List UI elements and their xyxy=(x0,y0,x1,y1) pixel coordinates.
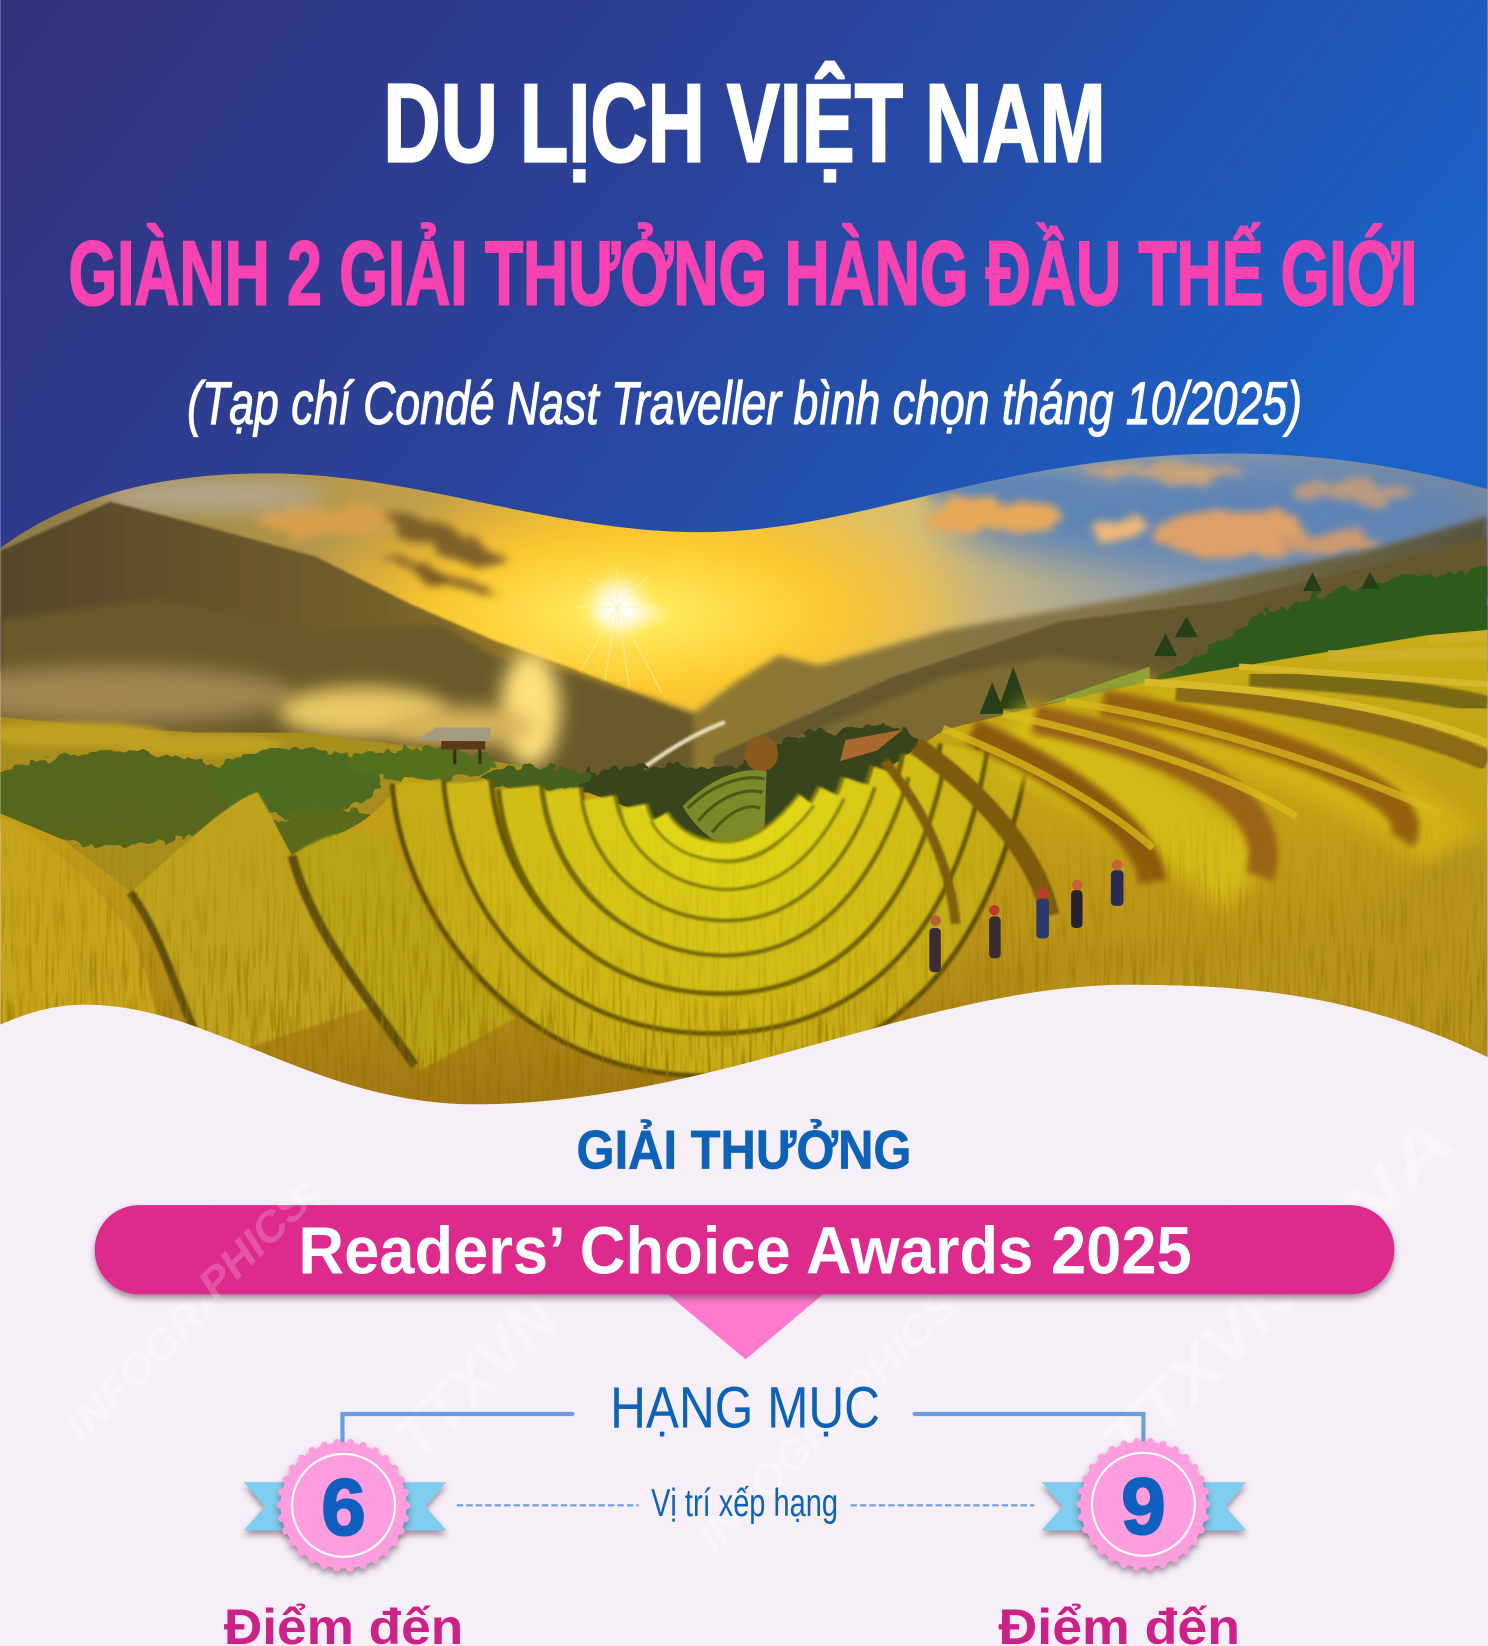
number 9: 9 xyxy=(1121,1462,1166,1551)
heading: award: GIẢI THƯỞNG xyxy=(577,1118,911,1180)
pointer triangle xyxy=(667,1293,824,1359)
watermarks: INFOGRAPHICS xyxy=(55,1172,333,1450)
hut xyxy=(417,727,490,764)
title line 1: DU LỊCH VIỆT NAM xyxy=(383,61,1106,186)
watermarks: TTXVN xyxy=(1087,1256,1311,1480)
grass ground xyxy=(0,630,1488,1113)
sun rays xyxy=(576,566,662,693)
concentric rice terraces xyxy=(418,735,1006,1050)
award banner xyxy=(95,1205,1394,1294)
grass texture xyxy=(0,844,1488,1104)
right dashed leader xyxy=(851,1504,1034,1506)
banner watermark: PHICS xyxy=(189,1178,318,1308)
valley trees and small terrace xyxy=(575,723,919,842)
left shelf and bushes xyxy=(0,717,588,966)
watermarks xyxy=(55,1103,1469,1560)
watermarks: INFOGRAPHICS xyxy=(687,1282,965,1560)
badge: rank 9 xyxy=(1042,1441,1246,1567)
foreground golden grass right xyxy=(1016,829,1488,1057)
sky xyxy=(0,441,1488,777)
farmers xyxy=(929,860,1123,972)
forested hill with trees xyxy=(980,569,1488,714)
left connector xyxy=(342,1414,572,1442)
left dashed leader xyxy=(457,1504,639,1506)
left grass lobes xyxy=(0,793,515,1071)
mountains right xyxy=(693,516,1488,787)
mountains left xyxy=(0,502,756,829)
right rice terraces xyxy=(884,636,1488,924)
heading: category with connector lines xyxy=(342,1376,1143,1442)
watermarks: VNA xyxy=(1276,1103,1469,1296)
category label: HẠNG MỤC xyxy=(610,1376,880,1441)
title block xyxy=(68,61,1417,437)
mist and river xyxy=(278,651,725,768)
right connector xyxy=(915,1414,1143,1442)
badge: rank 6 xyxy=(244,1442,446,1568)
ranking text: Vị trí xếp hạng xyxy=(651,1482,838,1525)
header gradient panel xyxy=(0,0,1488,672)
watermarks: TTXVN xyxy=(378,1280,572,1474)
banner text: Readers’ Choice Awards 2025 xyxy=(298,1213,1192,1288)
wavy photo: sunset over rice terraces xyxy=(0,441,1488,1113)
number 6: 6 xyxy=(321,1463,366,1552)
